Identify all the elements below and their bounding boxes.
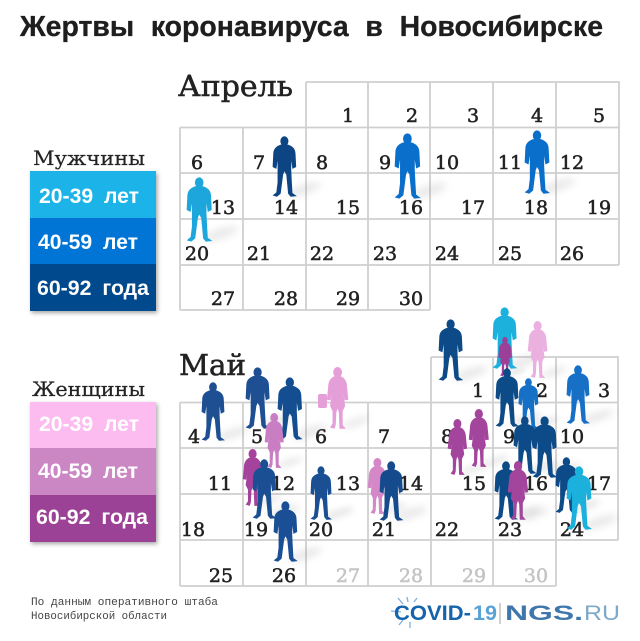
April day numbers: 20 [185,243,209,265]
figure: woman pink, May 6 [327,367,371,431]
April day numbers: 18 [524,197,548,219]
April day numbers: 28 [274,288,298,310]
April day numbers: 27 [211,288,235,310]
April day numbers: 19 [587,197,611,219]
May day numbers: 20 [309,519,333,541]
May day numbers: 4 [188,426,200,448]
figure: woman purple, May 23 [508,461,550,522]
figure: man navy, May 16 right [533,416,583,480]
May day numbers: 6 [315,426,327,448]
figure: man navy, May 4 [202,382,249,443]
figure: man navy, May 13 [311,466,354,522]
figure: man 40-59, April 9 [395,133,448,201]
April day numbers: 10 [435,152,459,174]
icon: pink woman's bag [318,394,327,408]
April day numbers: 6 [191,152,203,174]
May day numbers: 17 [587,473,611,495]
April day numbers: 2 [406,105,418,127]
figure: man, May 1 [439,319,489,383]
May day numbers: 7 [378,426,390,448]
figure: woman purple, May 12 [243,449,283,508]
May day numbers: 19 [244,519,268,541]
April day numbers: 16 [399,197,423,219]
May day numbers: 10 [560,426,584,448]
April day numbers: 17 [461,197,485,219]
May day numbers: 11 [208,473,232,495]
May day numbers: 27 [336,565,360,587]
May day numbers [181,380,611,587]
figure: man navy, May 9 [496,368,543,429]
legend: men: 40-59 лет [38,231,138,254]
figure: man cyan, May 2 [493,307,543,371]
May day numbers: 21 [372,519,396,541]
source note [31,596,218,623]
May day numbers: 13 [336,473,360,495]
legend: men: 60-92 года [37,277,149,300]
figure: man cyan, May 24 [567,466,619,532]
April day numbers: 7 [253,152,265,174]
May day numbers: 18 [181,519,205,541]
April day numbers: 3 [467,105,479,127]
source note: Новосибирской области [31,610,167,623]
May day numbers: 8 [441,426,453,448]
figure: man navy, May 12 [253,459,301,521]
legend heading: men: Мужчины [33,146,145,170]
figure: man 60-92, April 7 [273,136,322,199]
legend: men: 20-39 лет [39,185,139,208]
April day numbers: 13 [211,197,235,219]
heading: May: Май [179,348,246,382]
legend: women: 60-92 года [36,506,148,529]
figure: man navy, May 5 [246,367,296,431]
May day numbers: 5 [251,426,263,448]
logo: COVID-19 and NGS.RU overlaid: NGS. [505,602,583,625]
figures: May people [202,307,619,564]
figure: man blue, May 9 right [519,378,560,431]
May day numbers: 22 [435,519,459,541]
icon: virus [391,597,417,628]
May day numbers: 24 [560,519,584,541]
legend: women [30,377,156,542]
figure: woman purple, May 8 right [469,409,510,469]
figure: man navy, May 14 [380,461,428,523]
figure: woman purple, May 8 [448,419,487,477]
April day numbers: 26 [560,243,584,265]
calendar: April [180,82,619,310]
May day numbers: 14 [399,473,423,495]
May day numbers: 25 [209,565,233,587]
May day numbers: 30 [524,565,548,587]
April day numbers: 22 [310,243,334,265]
May day numbers: 28 [399,565,423,587]
May day numbers: 23 [498,519,522,541]
figure: man navy, May 16 [514,416,561,476]
calendar: May [180,357,618,587]
figure: woman mauve, May 12 [265,413,304,470]
April day numbers: 14 [274,197,298,219]
May day numbers: 26 [272,565,296,587]
figure: man blue, May 3 [567,365,614,426]
legend: men [30,146,156,311]
figure: woman mauve, May 14 [368,458,407,516]
April day numbers: 25 [498,243,522,265]
May day numbers: 15 [462,473,486,495]
logo: COVID-19 and NGS.RU overlaid: COVID- [394,602,471,625]
April day numbers: 30 [399,288,423,310]
legend heading: women: Женщины [32,377,145,401]
May day numbers: 1 [472,380,484,402]
May day numbers: 16 [524,473,548,495]
legend swatches: men [30,171,156,311]
legend: women: 20-39 лет [39,413,139,436]
April day numbers: 8 [316,152,328,174]
April day numbers: 11 [498,152,522,174]
figure: man 40-59, April 11 [525,130,577,196]
May day numbers: 2 [536,380,548,402]
legend swatches: women [30,402,156,542]
May day numbers: 29 [462,565,486,587]
figure: man 20-39, April 13 [187,177,239,244]
heading: April: Апрель [178,69,293,103]
logo: COVID-19 and NGS.RU overlaid: RU [584,602,620,625]
logo: COVID-19 and NGS.RU overlaid: 19 [473,602,497,625]
April day numbers [185,105,611,310]
figure: woman pink, May 2 [528,321,568,380]
May day numbers: 9 [503,426,515,448]
legend: women: 40-59 лет [38,460,138,483]
figure: man navy, May 23 [495,461,542,522]
title: Жертвы коронавируса в Новосибирске [19,11,603,43]
April day numbers: 24 [435,243,459,265]
April day numbers: 12 [560,152,584,174]
April day numbers: 1 [342,105,354,127]
April day numbers: 21 [247,243,271,265]
figure: man navy, May 19 [274,501,323,564]
source note: По данным оперативного штаба [31,596,218,609]
April day numbers: 4 [531,105,543,127]
April day numbers: 29 [336,288,360,310]
figure: woman purple, May 2 [498,337,526,377]
April day numbers: 5 [593,105,605,127]
logo: COVID-19 and NGS.RU overlaid [391,597,620,628]
April day numbers: 9 [379,152,391,174]
April day numbers: 15 [336,197,360,219]
May day numbers: 12 [271,473,295,495]
figure: man navy, May 17 [556,457,601,515]
May day numbers: 3 [598,380,610,402]
April day numbers: 23 [373,243,397,265]
figure: man navy, May 5 right [278,377,329,442]
